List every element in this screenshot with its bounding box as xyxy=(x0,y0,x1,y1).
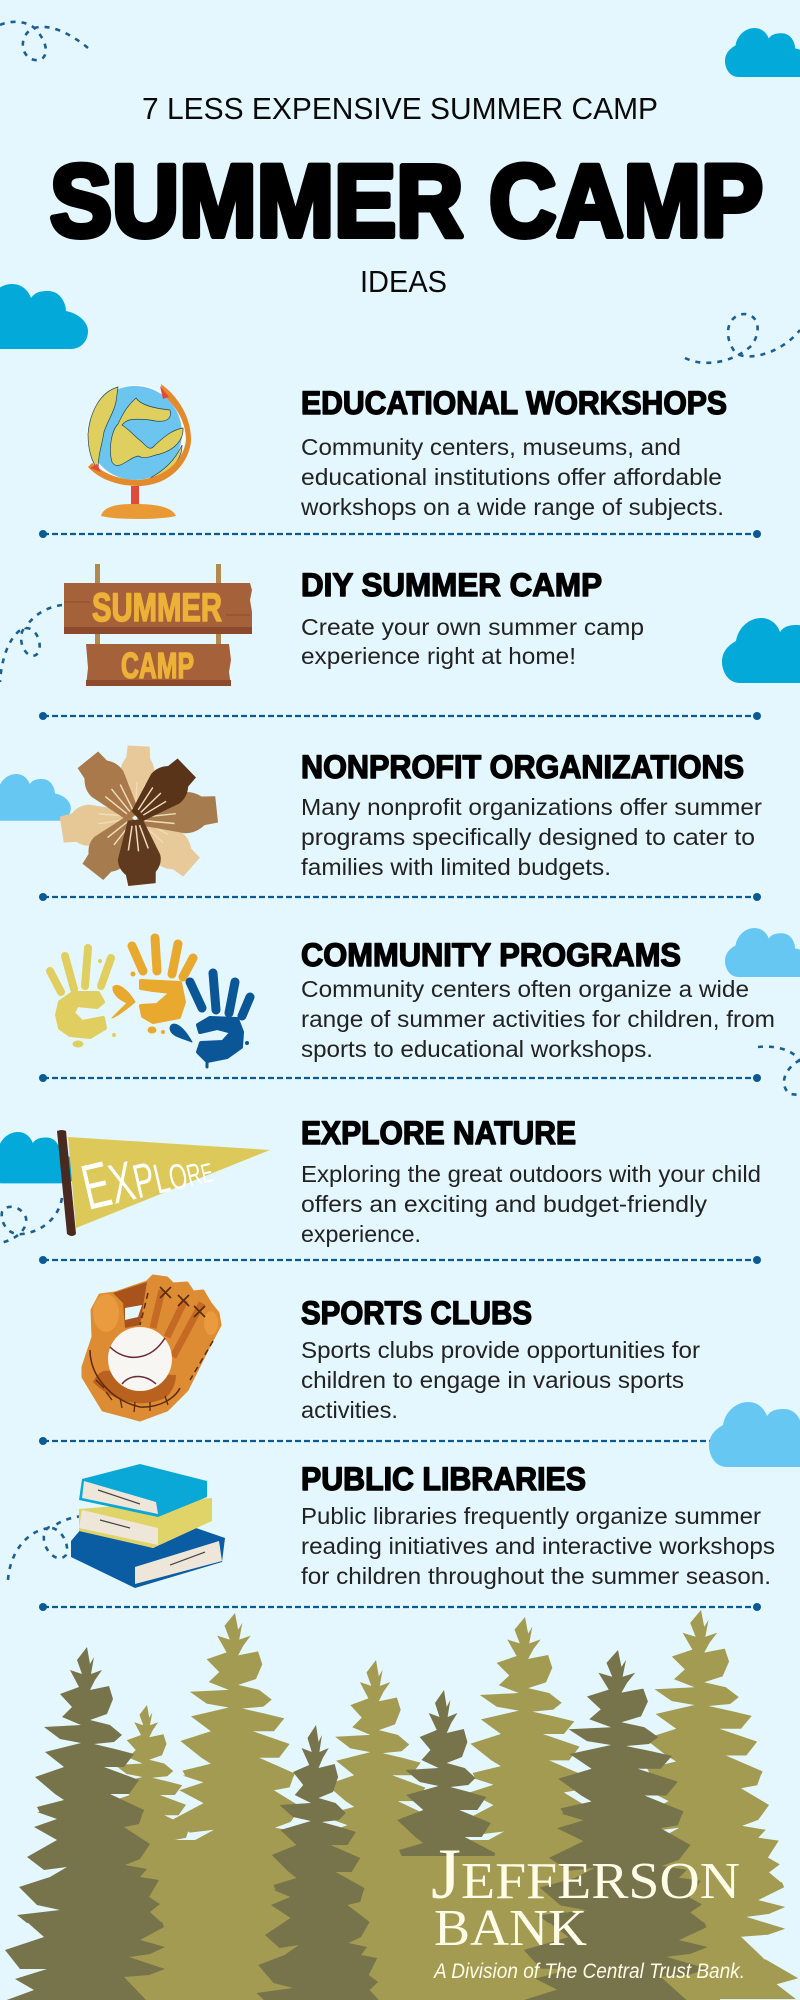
body text: sports to educational workshops. xyxy=(301,1036,653,1062)
body text: Community centers, museums, and xyxy=(301,434,681,460)
icon: wooden sign xyxy=(64,564,252,686)
heading: PUBLIC LIBRARIES xyxy=(301,1461,586,1497)
body text xyxy=(301,1337,700,1423)
body text: programs specifically designed to cater to xyxy=(301,824,755,850)
icon: stack of books xyxy=(71,1464,225,1588)
dashed swirls xyxy=(0,22,800,1580)
logo: Jefferson Bank xyxy=(431,1834,745,1983)
body text: range of summer activities for children, from xyxy=(301,1006,775,1032)
body text xyxy=(301,976,775,1062)
panel: diy summer camp xyxy=(64,564,644,686)
icon: painted handprints xyxy=(50,938,250,1067)
body text: Exploring the great outdoors with your child xyxy=(301,1161,761,1187)
body text: educational institutions offer affordable xyxy=(301,464,722,490)
body text: Sports clubs provide opportunities for xyxy=(301,1337,700,1363)
icon: wooden sign: CAMP xyxy=(121,645,194,686)
icon: wooden sign: SUMMER xyxy=(92,586,222,630)
body text: Community centers often organize a wide xyxy=(301,976,749,1002)
panel: public libraries xyxy=(71,1461,775,1589)
panel: nonprofit organizations xyxy=(59,745,762,887)
panel: explore nature xyxy=(57,1115,761,1247)
icon: explore pennant: EXPLORE xyxy=(75,1124,218,1224)
body text xyxy=(300,434,724,520)
body text xyxy=(301,1503,775,1589)
body text: children to engage in various sports xyxy=(301,1367,684,1393)
heading: COMMUNITY PROGRAMS xyxy=(301,937,681,973)
heading: EXPLORE NATURE xyxy=(301,1115,576,1151)
forest of pine trees xyxy=(4,1610,798,2000)
logo: Jefferson Bank: A Division of The Central Trust Bank. xyxy=(432,1960,745,1983)
body text: experience. xyxy=(301,1221,421,1247)
logo: Jefferson Bank: JEFFERSON xyxy=(431,1834,740,1914)
body text: experience right at home! xyxy=(301,643,576,669)
icon: explore pennant xyxy=(57,1124,270,1236)
heading: EDUCATIONAL WORKSHOPS xyxy=(301,385,727,421)
body text xyxy=(301,614,644,669)
icon: joined hands xyxy=(59,745,219,887)
heading: DIY SUMMER CAMP xyxy=(301,567,602,603)
heading: NONPROFIT ORGANIZATIONS xyxy=(301,749,744,785)
body text: Many nonprofit organizations offer summer xyxy=(301,794,762,820)
body text: reading initiatives and interactive workshops xyxy=(301,1533,775,1559)
cloud over divider xyxy=(709,1402,800,1467)
subtitle: 7 LESS EXPENSIVE SUMMER CAMP xyxy=(142,91,658,126)
body text: activities. xyxy=(301,1397,398,1423)
panel: community programs xyxy=(50,937,775,1067)
background clouds xyxy=(0,28,800,1183)
body text xyxy=(301,794,762,880)
icon: baseball glove xyxy=(83,1276,220,1420)
body text: Public libraries frequently organize summer xyxy=(301,1503,761,1529)
body text: offers an exciting and budget-friendly xyxy=(301,1191,708,1217)
panel: educational workshops xyxy=(87,384,727,520)
body text xyxy=(301,1161,761,1247)
panel: sports clubs xyxy=(83,1276,700,1423)
heading: SPORTS CLUBS xyxy=(301,1295,532,1331)
body text: workshops on a wide range of subjects. xyxy=(300,494,724,520)
body text: Create your own summer camp xyxy=(301,614,644,640)
subtitle: ideas: IDEAS xyxy=(360,264,447,299)
body text: for children throughout the summer season. xyxy=(301,1563,771,1589)
body text: families with limited budgets. xyxy=(301,854,611,880)
logo: Jefferson Bank: BANK xyxy=(434,1900,587,1957)
icon: globe xyxy=(87,384,191,519)
